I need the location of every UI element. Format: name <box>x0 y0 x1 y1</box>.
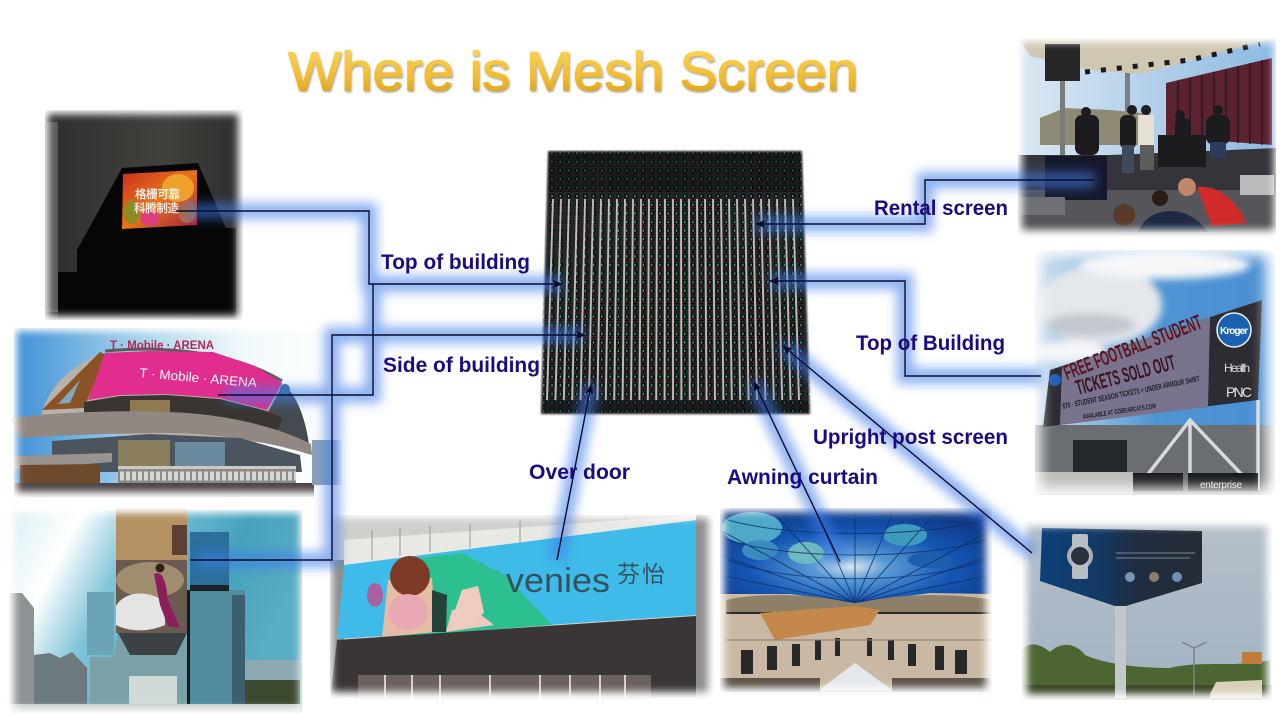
LED banner on tower <box>116 508 187 633</box>
label: over door: Over door <box>529 461 630 484</box>
flight cases <box>1240 175 1274 195</box>
arrow: side of building to mesh <box>190 335 585 560</box>
speaker box <box>1045 156 1107 200</box>
panel: mesh screen module <box>539 149 812 416</box>
blue glass box <box>190 532 229 585</box>
flower screen: 科腾制造 <box>134 201 180 215</box>
clouds <box>1034 251 1250 363</box>
pole <box>1115 600 1126 698</box>
crouching man in red <box>1178 178 1246 226</box>
crew <box>1075 105 1230 167</box>
label: top of building: Top of building <box>381 251 530 274</box>
title: Where is Mesh Screen <box>288 40 858 102</box>
photo: T-Mobile Arena: T · Mobile · ARENA <box>139 365 258 390</box>
stage floor <box>1018 148 1276 190</box>
photo: rental stage screen <box>1018 38 1276 240</box>
street lamp <box>1182 642 1207 695</box>
arrow: upright post to mesh <box>783 346 1032 553</box>
side glass box <box>87 592 114 655</box>
cyan screen: venies <box>506 562 610 600</box>
billboard <box>1043 300 1262 427</box>
building silhouette <box>58 163 236 318</box>
glass band <box>84 395 282 432</box>
billboard <box>1040 528 1202 606</box>
photo: T-Mobile Arena <box>10 328 344 498</box>
trees <box>1022 644 1270 685</box>
photo: glass tower with advertising banner <box>9 508 302 714</box>
billboard: TICKETS SOLD OUT <box>1073 351 1178 400</box>
dark right dome <box>268 390 309 443</box>
glass tower <box>190 590 245 710</box>
cyan screen: 芬怡 <box>617 561 665 587</box>
LED stage screen <box>1166 58 1272 145</box>
photo: stadium billboard: enterprise <box>1200 480 1242 491</box>
label: side of building: Side of building <box>383 354 540 377</box>
label: top of building right: Top of Building <box>856 332 1005 355</box>
lower stadium <box>1035 425 1275 495</box>
cyan screen <box>337 520 696 639</box>
photo: upright post billboard <box>1022 520 1272 700</box>
connector glows <box>190 180 1095 562</box>
pink screen <box>88 351 282 410</box>
old buildings left <box>9 593 34 707</box>
arena sign: T · Mobile · ARENA <box>110 340 214 352</box>
arrow: rental screen to mesh <box>756 180 1095 224</box>
roof rail <box>105 349 282 381</box>
arrow: over door to mesh <box>557 385 591 560</box>
canopy <box>1018 38 1276 74</box>
arrow: top of building to mesh <box>176 211 562 284</box>
arrow: arena to mesh <box>218 284 373 395</box>
arrow: top of building right to mesh <box>770 281 1041 376</box>
billboard: Health <box>1224 361 1250 375</box>
dome <box>42 353 283 443</box>
photo: building-top screen at night <box>45 110 243 320</box>
photo: awning curtain ceiling <box>720 508 992 696</box>
billboard: Kroger <box>1220 326 1248 337</box>
billboard: PNC <box>1226 384 1252 400</box>
photo: over-door screen <box>330 515 715 700</box>
billboard: AVAILABLE AT GOBEARCATS.COM <box>1082 403 1157 421</box>
flower screen: 格栅可靠 <box>135 187 180 201</box>
blue sky ceiling <box>720 508 992 603</box>
label: rental screen: Rental screen <box>874 197 1008 220</box>
lower glass base <box>90 633 187 704</box>
speaker stack <box>1045 44 1080 156</box>
struts <box>1145 400 1258 490</box>
flower screen <box>122 170 197 229</box>
label: awning curtain: Awning curtain <box>727 466 878 489</box>
label: upright post screen: Upright post screen <box>813 426 1008 449</box>
dark wall <box>330 616 696 700</box>
photo: stadium billboard <box>1034 250 1275 495</box>
arrow: awning curtain to mesh <box>754 382 840 562</box>
